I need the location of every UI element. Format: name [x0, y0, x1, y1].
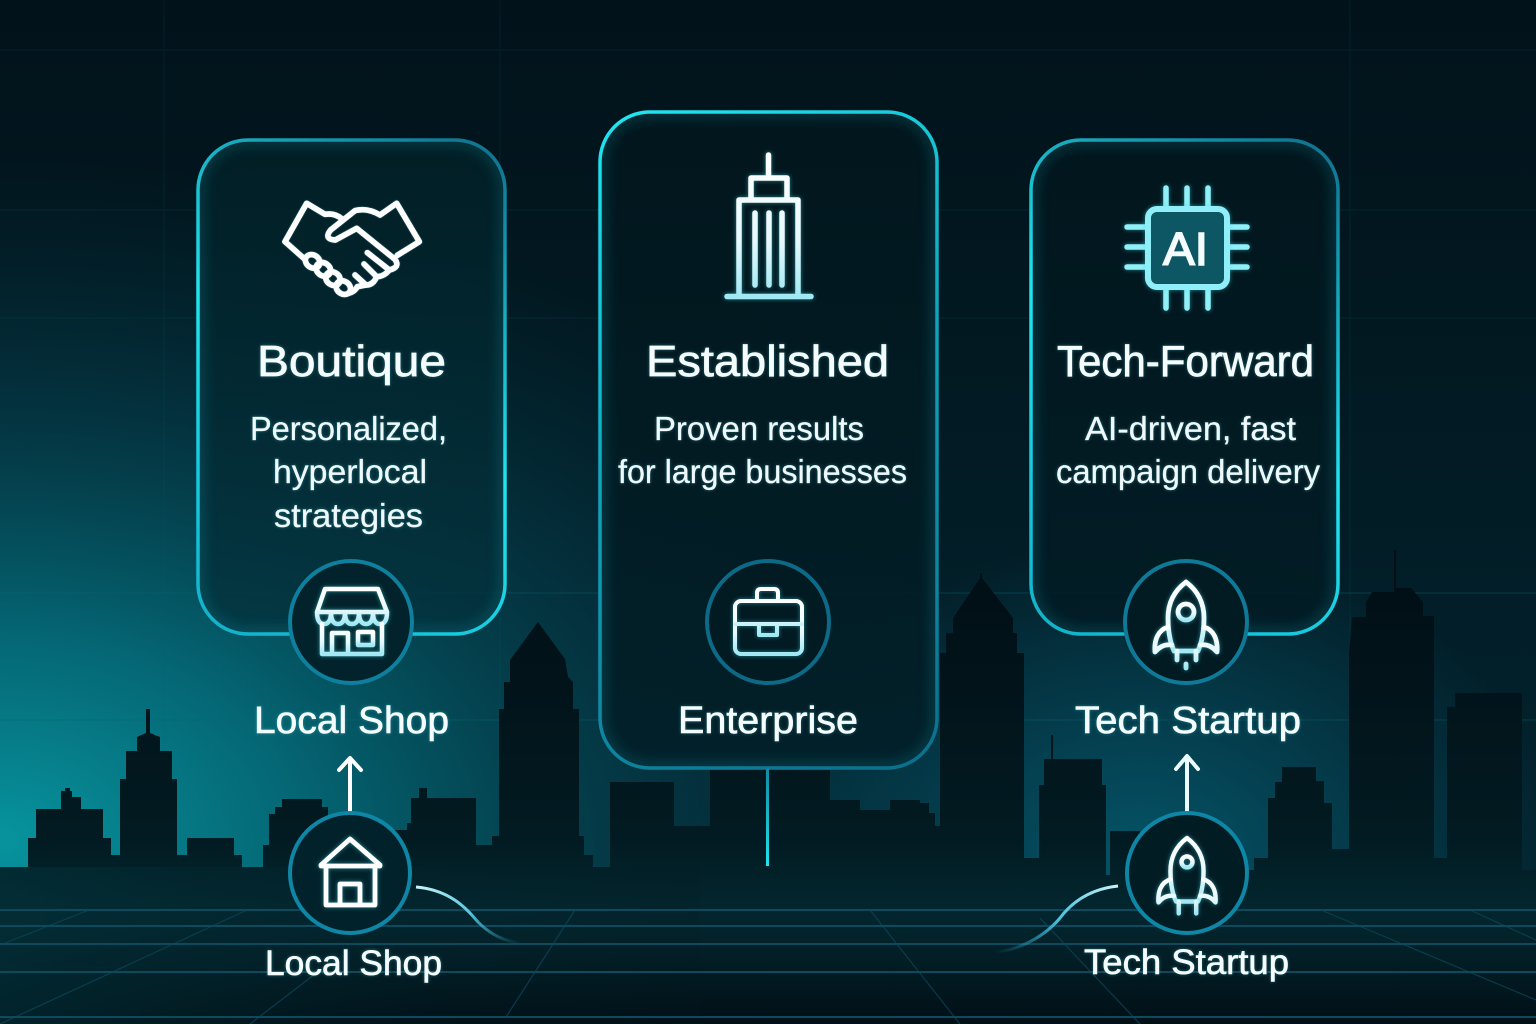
icon: lower rocket — [1158, 838, 1216, 913]
icon: house — [321, 839, 380, 905]
perspective floor grid — [0, 910, 1536, 1024]
text: Boutique description: Personalized, — [250, 410, 447, 447]
heading: Tech-Forward: Tech-Forward — [1057, 337, 1314, 386]
text: Tech-Forward description — [1056, 410, 1320, 490]
text: Established description — [618, 410, 907, 490]
panel: Tech-Forward — [1031, 140, 1338, 634]
connector: left curve — [416, 887, 522, 943]
icon: handshake — [285, 203, 419, 297]
label: Enterprise: Enterprise — [678, 700, 858, 742]
icon: store — [317, 589, 387, 654]
badge: briefcase — [707, 561, 829, 683]
icon: AI chip — [1127, 188, 1247, 308]
label: Tech Startup upper: Tech Startup — [1075, 700, 1301, 742]
icon: office tower — [727, 155, 811, 296]
label: Local Shop upper: Local Shop — [254, 700, 449, 742]
badge: store — [290, 561, 412, 683]
label: Tech Startup lower: Tech Startup — [1084, 943, 1289, 982]
text: Boutique description: strategies — [274, 497, 423, 534]
text: Established description: Proven results — [654, 410, 864, 447]
icon: briefcase — [735, 589, 802, 654]
heading: Boutique: Boutique — [257, 337, 446, 386]
text: Tech-Forward description: AI-driven, fast — [1085, 410, 1296, 447]
panel: Established — [600, 112, 937, 768]
arrow: Local Shop upward — [339, 758, 361, 812]
text: Established description: for large businesses — [618, 453, 907, 490]
badge: rocket — [1125, 561, 1247, 683]
text: Boutique description — [250, 410, 447, 534]
connector: right curve — [995, 886, 1118, 952]
badge: house — [290, 813, 410, 933]
arrow: Tech Startup upward — [1176, 756, 1198, 812]
icon: AI chip: AI — [1163, 223, 1208, 275]
badge: lower rocket — [1127, 813, 1247, 933]
heading: Established: Established — [646, 337, 889, 386]
connector: Established stem — [766, 769, 769, 866]
city skyline silhouette — [0, 550, 1536, 1024]
icon: rocket — [1155, 582, 1217, 668]
text: Boutique description: hyperlocal — [273, 453, 427, 490]
label: Local Shop lower: Local Shop — [265, 944, 442, 983]
text: Tech-Forward description: campaign delivery — [1056, 453, 1320, 490]
panel: Boutique — [198, 140, 505, 634]
